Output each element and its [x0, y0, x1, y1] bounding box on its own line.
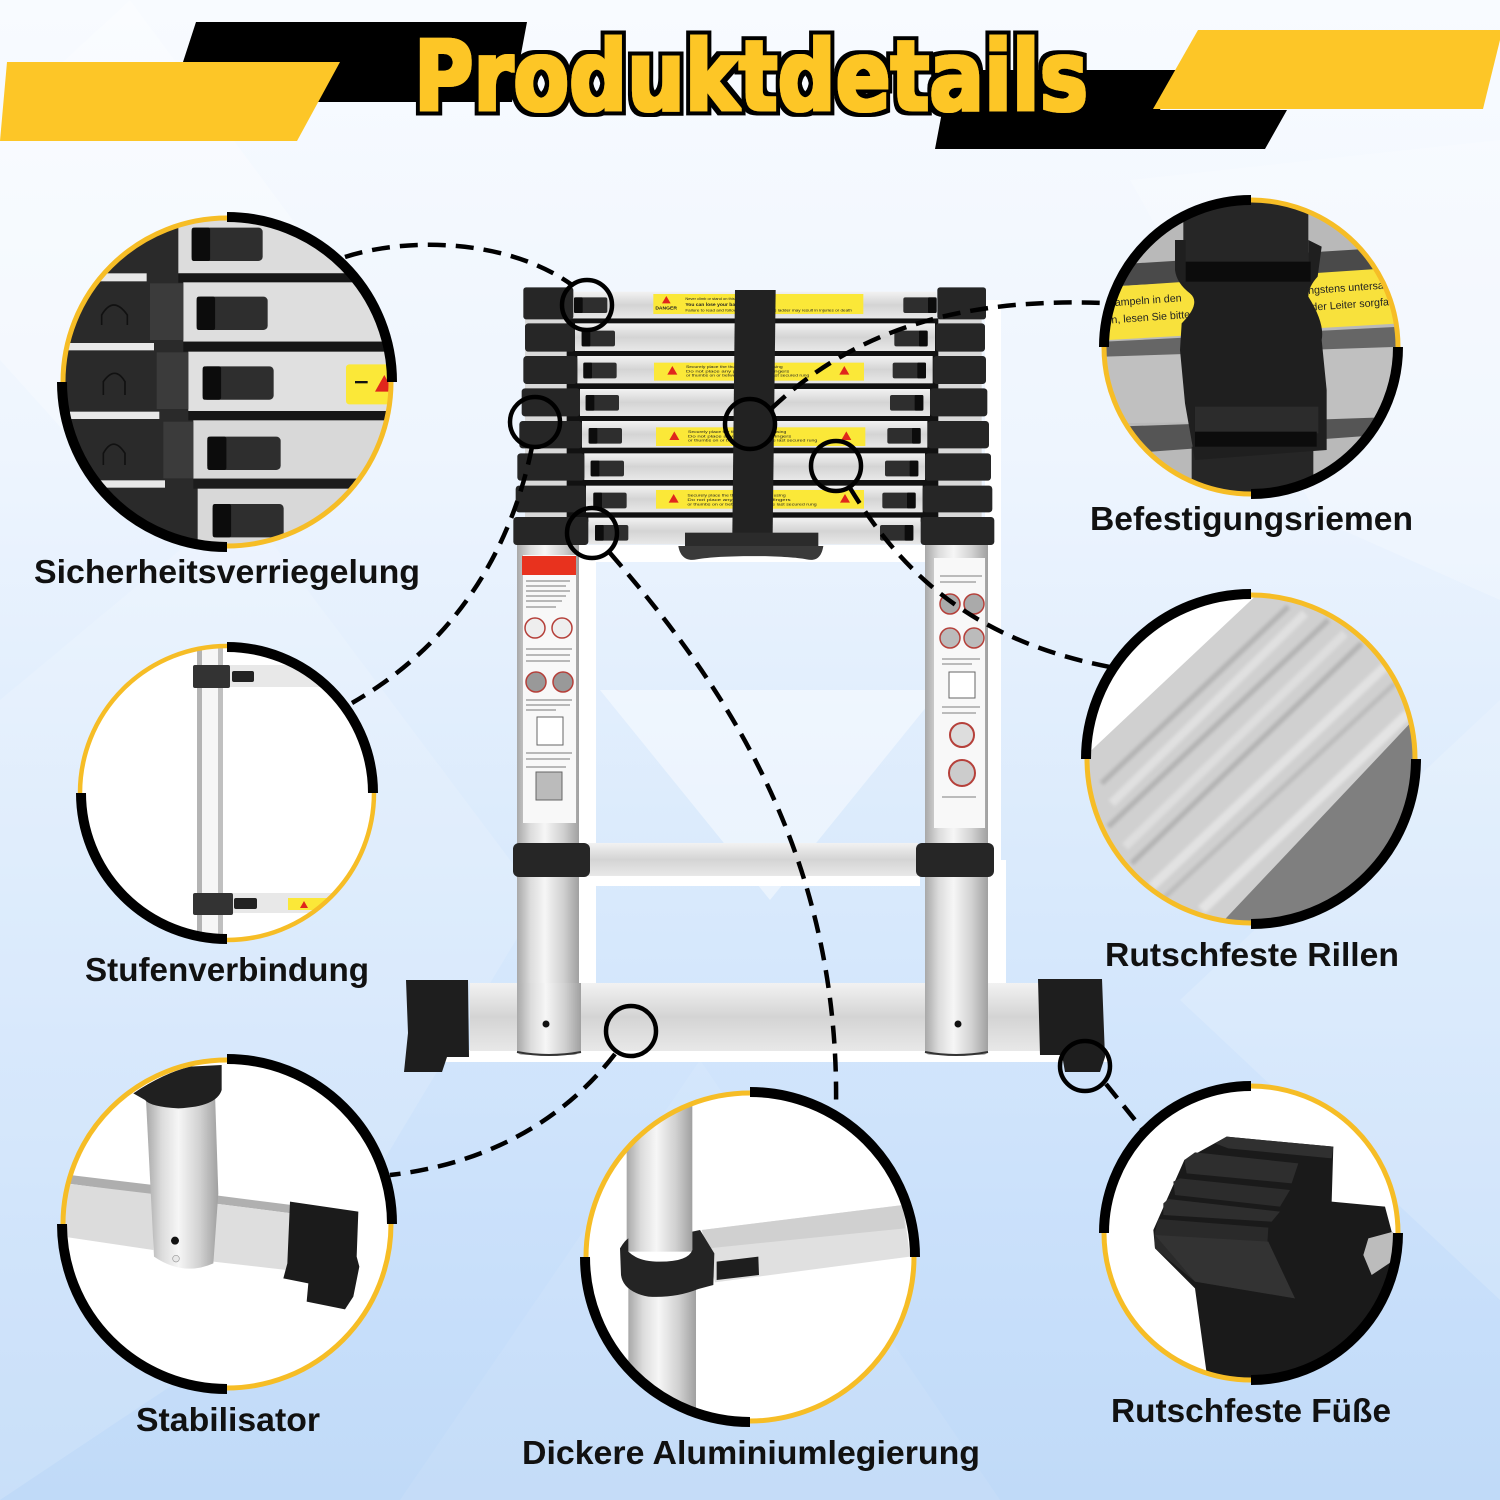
label: Befestigungsriemen: Befestigungsriemen	[1090, 500, 1413, 537]
ladder: folded rungs: DANGER	[655, 305, 677, 311]
ladder: folded rungs: Never climb or stand on this section	[685, 296, 748, 301]
magnifier rings on ladder	[510, 280, 1110, 1091]
label: Rutschfeste Rillen: Rutschfeste Rillen	[1105, 936, 1399, 973]
ladder: folded rungs: Failure to read and follow instructions on this ladder may result in injuries or death	[685, 308, 852, 312]
ring: Stabilisator	[62, 1059, 392, 1389]
ladder: folded rungs: You can lose your balance	[685, 302, 748, 308]
panel: Dickere Aluminiumlegierung	[585, 1085, 915, 1428]
panel: Befestigungsriemen: ngstens untersa	[1308, 280, 1384, 297]
ring: Befestigungsriemen	[1104, 200, 1398, 494]
dashed connector: fastening strap	[772, 302, 1105, 408]
panel: Befestigungsriemen: ampeln in den	[1114, 292, 1182, 309]
panel: Stabilisator	[62, 1059, 392, 1389]
ladder: folded rungs: Do not place any part of hands, fingers	[687, 498, 791, 502]
header banner shapes	[0, 22, 1500, 149]
ladder: folded rungs: or thumbs on or between rungs above last secured rung	[686, 374, 809, 378]
ring: Stufenverbindung	[80, 646, 374, 940]
ladder: folded rungs: Do not place any part of hands, fingers	[688, 434, 792, 438]
panel: Sicherheitsverriegelung	[50, 205, 400, 555]
ring: Dickere Aluminiumlegierung	[585, 1092, 915, 1422]
ring: Sicherheitsverriegelung	[62, 217, 392, 547]
ladder: folded rungs: or thumbs on or between rungs above last secured rung	[688, 439, 817, 443]
label: Sicherheitsverriegelung: Sicherheitsverriegelung	[34, 553, 420, 590]
dashed connector: anti-slip feet	[1106, 1084, 1143, 1130]
ladder: folded rungs: or thumbs on or between rungs above last secured rung	[687, 502, 817, 506]
panel: Befestigungsriemen	[1104, 200, 1402, 494]
dashed connector: stabilizer	[390, 1054, 615, 1175]
panel: Rutschfeste Füße	[1104, 1086, 1398, 1383]
panel: Stufenverbindung	[80, 640, 374, 950]
label: Dickere Aluminiumlegierung: Dickere Aluminiumlegierung	[522, 1434, 980, 1471]
ladder: right safety sticker	[934, 558, 985, 828]
ladder: folded rungs: Securely place the thumb latch before using	[687, 494, 786, 498]
ladder: middle rung and cuffs	[513, 843, 994, 877]
dashed connector: anti-slip grooves	[850, 488, 1110, 667]
ladder: folded rungs: Securely place the thumb latch before using	[688, 430, 786, 434]
ring: Rutschfeste Füße	[1104, 1086, 1398, 1380]
white halo behind ladder	[425, 300, 1110, 1062]
ladder: folded rungs: Do not place any part of hands, fingers	[686, 369, 790, 373]
dashed connector: thicker aluminium	[610, 553, 836, 1108]
label: Rutschfeste Füße: Rutschfeste Füße	[1111, 1392, 1391, 1429]
ladder: left safety sticker	[522, 555, 576, 823]
panel: Rutschfeste Rillen	[1081, 589, 1421, 929]
ring: Rutschfeste Rillen	[1086, 594, 1416, 924]
label: Stabilisator: Stabilisator	[136, 1401, 320, 1438]
panel: Befestigungsriemen: n, lesen Sie bitte	[1111, 309, 1191, 326]
ladder: folded rungs	[513, 287, 994, 560]
dashed connector: safety lock	[345, 245, 572, 285]
title: Produktdetails	[414, 20, 1088, 133]
ladder: bottom stabilizer bar	[404, 979, 1105, 1072]
ladder: folded rungs: Securely place the thumb latch before using	[686, 365, 783, 369]
dashed connector: rung connection	[352, 447, 532, 703]
panel: Befestigungsriemen: der Leiter sorgfa	[1311, 296, 1389, 314]
ladder: telescopic tubes	[517, 540, 988, 1055]
label: Stufenverbindung: Stufenverbindung	[85, 951, 369, 988]
